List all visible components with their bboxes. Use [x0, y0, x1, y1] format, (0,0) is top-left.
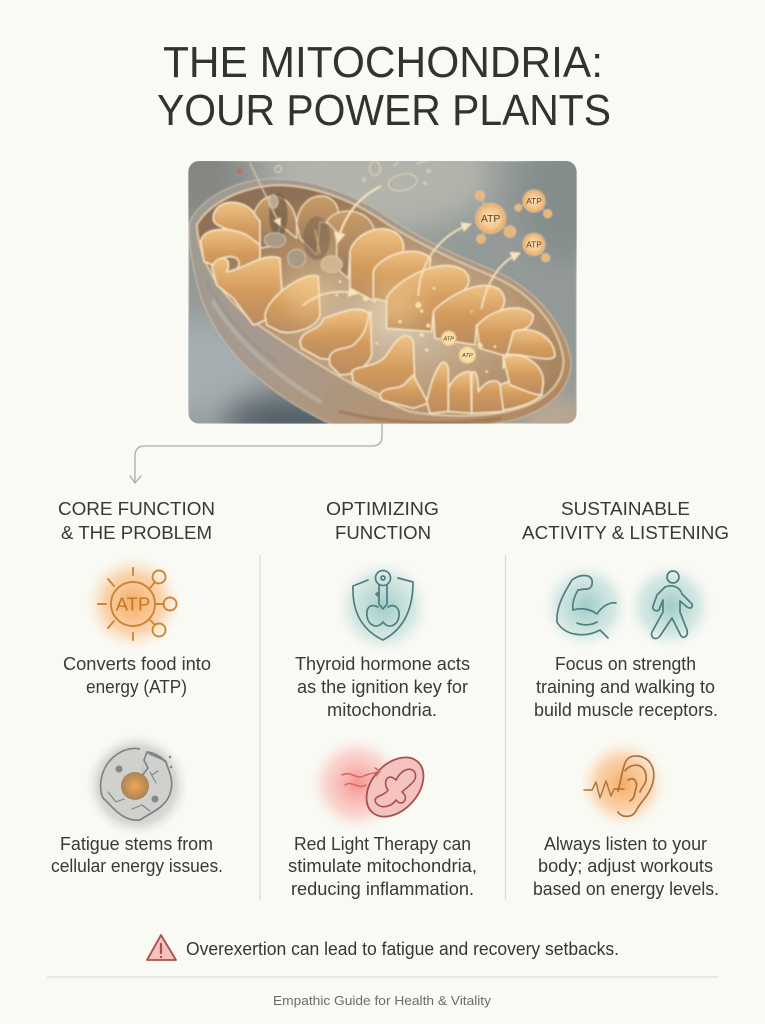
energy arrows — [250, 163, 519, 308]
wall streaks — [213, 302, 320, 402]
text: converts food — [63, 654, 211, 697]
heading: optimizing function — [326, 498, 439, 543]
text: listen: based on energy levels. — [533, 879, 719, 899]
text: red light: Red Light Therapy can — [294, 834, 471, 854]
heading: core function: CORE FUNCTION — [58, 498, 215, 519]
inner cavity — [197, 185, 563, 416]
ATP labels: ATP — [526, 239, 542, 249]
icon: ATP energy: ATP — [116, 594, 150, 614]
text: thyroid: as the ignition key for — [297, 677, 468, 697]
heading: sustainable activity — [522, 498, 729, 543]
ATP labels: ATP — [442, 336, 454, 342]
ATP labels: ATP — [461, 353, 473, 359]
heading: sustainable activity: SUSTAINABLE — [561, 498, 690, 519]
organelles — [264, 195, 342, 273]
text: thyroid — [295, 654, 470, 720]
sparks — [335, 280, 496, 373]
floating food icons — [275, 161, 430, 193]
icon: ear and pulse — [579, 740, 667, 828]
text: strength: Focus on strength — [555, 654, 696, 674]
icon: ATP energy — [85, 555, 181, 651]
connector arrow — [130, 424, 382, 483]
dark recess shadows — [269, 193, 288, 237]
heading: core function — [58, 498, 215, 543]
icon: walking person — [626, 562, 714, 650]
text: fatigue: Fatigue stems from — [60, 834, 213, 854]
icon: damaged cell — [85, 733, 189, 837]
text: red light — [288, 834, 477, 899]
text: converts food: energy (ATP) — [86, 677, 187, 697]
icon: flexed arm — [542, 562, 630, 650]
text: red light: stimulate mitochondria, — [288, 856, 477, 876]
ATP spheres — [441, 190, 552, 363]
ATP labels — [442, 196, 542, 359]
icon: red light mitochondrion — [309, 736, 435, 832]
text: listen — [533, 834, 719, 899]
text: fatigue — [51, 834, 223, 876]
text: strength — [534, 654, 718, 720]
title: THE MITOCHONDRIA: — [163, 38, 603, 87]
text: listen: body; adjust workouts — [538, 856, 713, 876]
title: YOUR POWER PLANTS — [157, 86, 611, 135]
footer: Empathic Guide for Health & Vitality — [273, 994, 492, 1008]
text: converts food: Converts food into — [63, 654, 211, 674]
heading: optimizing function: FUNCTION — [335, 522, 431, 543]
heading: sustainable activity: ACTIVITY & LISTENING — [522, 522, 729, 543]
ATP labels: ATP — [526, 196, 542, 206]
illustration: mitochondrion cross-section — [188, 161, 577, 424]
text: thyroid: mitochondria. — [327, 700, 437, 720]
cristae folds — [201, 202, 555, 413]
text: red light: reducing inflammation. — [291, 879, 474, 899]
heading: optimizing function: OPTIMIZING — [326, 498, 439, 519]
title — [157, 38, 611, 135]
outer wall — [189, 179, 571, 427]
heading: core function: & THE PROBLEM — [61, 522, 212, 543]
icon: warning triangle — [147, 935, 176, 960]
warning callout: Overexertion can lead to fatigue and recovery setbacks. — [186, 939, 619, 959]
text: strength: build muscle receptors. — [534, 700, 718, 720]
glow on folds — [373, 285, 420, 325]
icon: thyroid key shield — [335, 559, 431, 655]
text: listen: Always listen to your — [544, 834, 707, 854]
back folds — [252, 196, 374, 278]
text: strength: training and walking to — [536, 677, 715, 697]
text: fatigue: cellular energy issues. — [51, 856, 223, 876]
text: thyroid: Thyroid hormone acts — [295, 654, 470, 674]
ATP labels: ATP — [481, 214, 500, 225]
